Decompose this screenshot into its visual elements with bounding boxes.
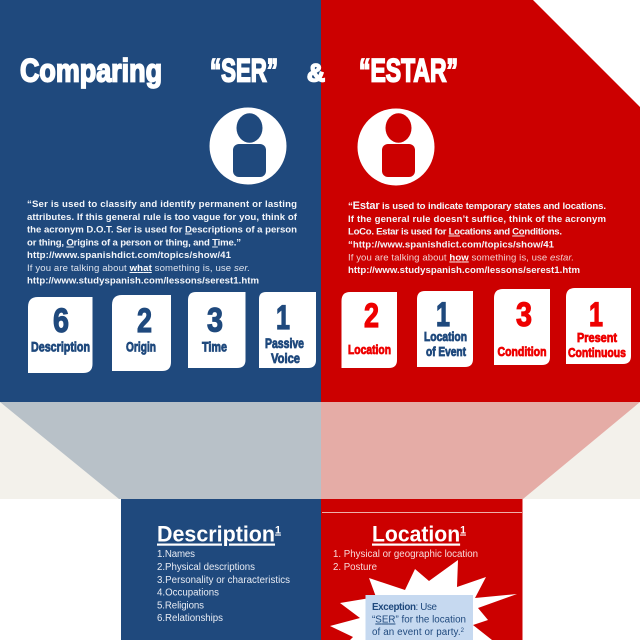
list: description uses: 1.Names [157, 549, 195, 560]
text block: ser definition: attributes. If this general rule is too vague for you, think of [27, 212, 298, 223]
card: 3 condition: 3 [516, 296, 532, 334]
text block: ser definition: the acronym D.O.T. Ser is used for Descriptions of a person [27, 224, 297, 236]
text block: ser definition: or thing, Origins of a person or thing, and Time.” [27, 238, 241, 248]
callout: exception: 2 [461, 628, 465, 634]
card: 1 present continuous: Continuous [568, 345, 626, 360]
card: 6 description [28, 297, 92, 373]
heading: location: Location [372, 522, 464, 546]
card: 1 passive voice [259, 292, 316, 368]
card: 1 location of event: Location [424, 329, 467, 344]
card: 1 location of event: of Event [426, 344, 467, 359]
list: location uses: 1. Physical or geographic location [333, 549, 478, 560]
text block: estar definition: http://www.studyspanish.com/lessons/serest1.htm [348, 265, 580, 276]
text block: ser definition: http://www.studyspanish.com/lessons/serest1.htm [27, 276, 259, 286]
card: 2 origin: Origin [126, 340, 156, 355]
starburst [330, 560, 517, 640]
text block: estar definition: LoCo. Estar is used for Locations and Conditions. [348, 226, 562, 238]
text block: ser definition: If you are talking about what something is, use ser. [27, 263, 250, 274]
list: description uses: 2.Physical descriptions [157, 562, 255, 573]
title [20, 52, 458, 88]
title: & [307, 60, 325, 88]
card: 2 location [342, 292, 397, 368]
funnel band [0, 402, 640, 499]
panel: location [321, 499, 522, 640]
card: 3 condition [494, 289, 550, 365]
card: 6 description: 6 [53, 302, 69, 340]
heading: description: Description [157, 522, 278, 546]
text block: estar definition: If the general rule doesn’t suffice, think of the acronym [348, 214, 606, 225]
text block: estar definition [348, 200, 606, 276]
card: 3 condition: Condition [498, 344, 547, 359]
text block: estar definition: “Estar is used to indicate temporary states and locations. [348, 200, 606, 212]
icon: estar person [358, 108, 434, 186]
list: location uses [333, 549, 478, 573]
list: description uses: 3.Personality or characteristics [157, 575, 290, 586]
title: “SER” [210, 52, 278, 88]
panel: estar background [321, 0, 640, 402]
card: 1 location of event [417, 291, 473, 367]
text block: ser definition [27, 199, 298, 286]
card: 3 time [188, 292, 246, 368]
text block: ser definition: http://www.spanishdict.com/topics/show/41 [27, 250, 232, 261]
panel: ser background [0, 0, 321, 402]
icon: ser person [210, 108, 286, 184]
card: 3 time: 3 [207, 302, 223, 340]
list: description uses [157, 549, 290, 624]
callout: exception: “SER” for the location [372, 614, 466, 626]
list: location uses: 2. Posture [333, 562, 377, 573]
card: 2 origin: 2 [137, 302, 152, 340]
list: description uses: 6.Relationships [157, 613, 223, 624]
panel: description [121, 499, 321, 640]
heading: location: 1 [460, 524, 466, 536]
card: 1 present continuous: Present [577, 330, 618, 345]
card: 1 passive voice: Voice [271, 351, 300, 366]
card: 1 passive voice: Passive [265, 336, 304, 351]
callout: exception: of an event or party. [372, 627, 461, 638]
card: 2 location: Location [348, 342, 391, 357]
card: 2 location: 2 [364, 297, 379, 335]
text block: estar definition: “http://www.spanishdict.com/topics/show/41 [348, 240, 555, 250]
callout: exception: Exception: Use [372, 602, 438, 613]
list: description uses: 4.Occupations [157, 588, 219, 598]
list: description uses: 5.Religions [157, 600, 204, 612]
text block: ser definition: “Ser is used to classify and identify permanent or lasting [27, 199, 297, 210]
card: 1 location of event: 1 [436, 296, 450, 334]
title: “ESTAR” [359, 52, 458, 88]
card: 2 origin [112, 295, 171, 371]
title: Comparing [20, 52, 162, 88]
card: 1 present continuous: 1 [589, 296, 603, 334]
heading: description: 1 [275, 524, 281, 536]
callout: exception [366, 595, 473, 640]
card: 6 description: Description [31, 340, 90, 355]
card: 1 present continuous [566, 288, 631, 364]
text block: estar definition: If you are talking about how something is, use estar. [348, 252, 574, 264]
card: 3 time: Time [202, 340, 227, 355]
card: 1 passive voice: 1 [276, 299, 290, 337]
